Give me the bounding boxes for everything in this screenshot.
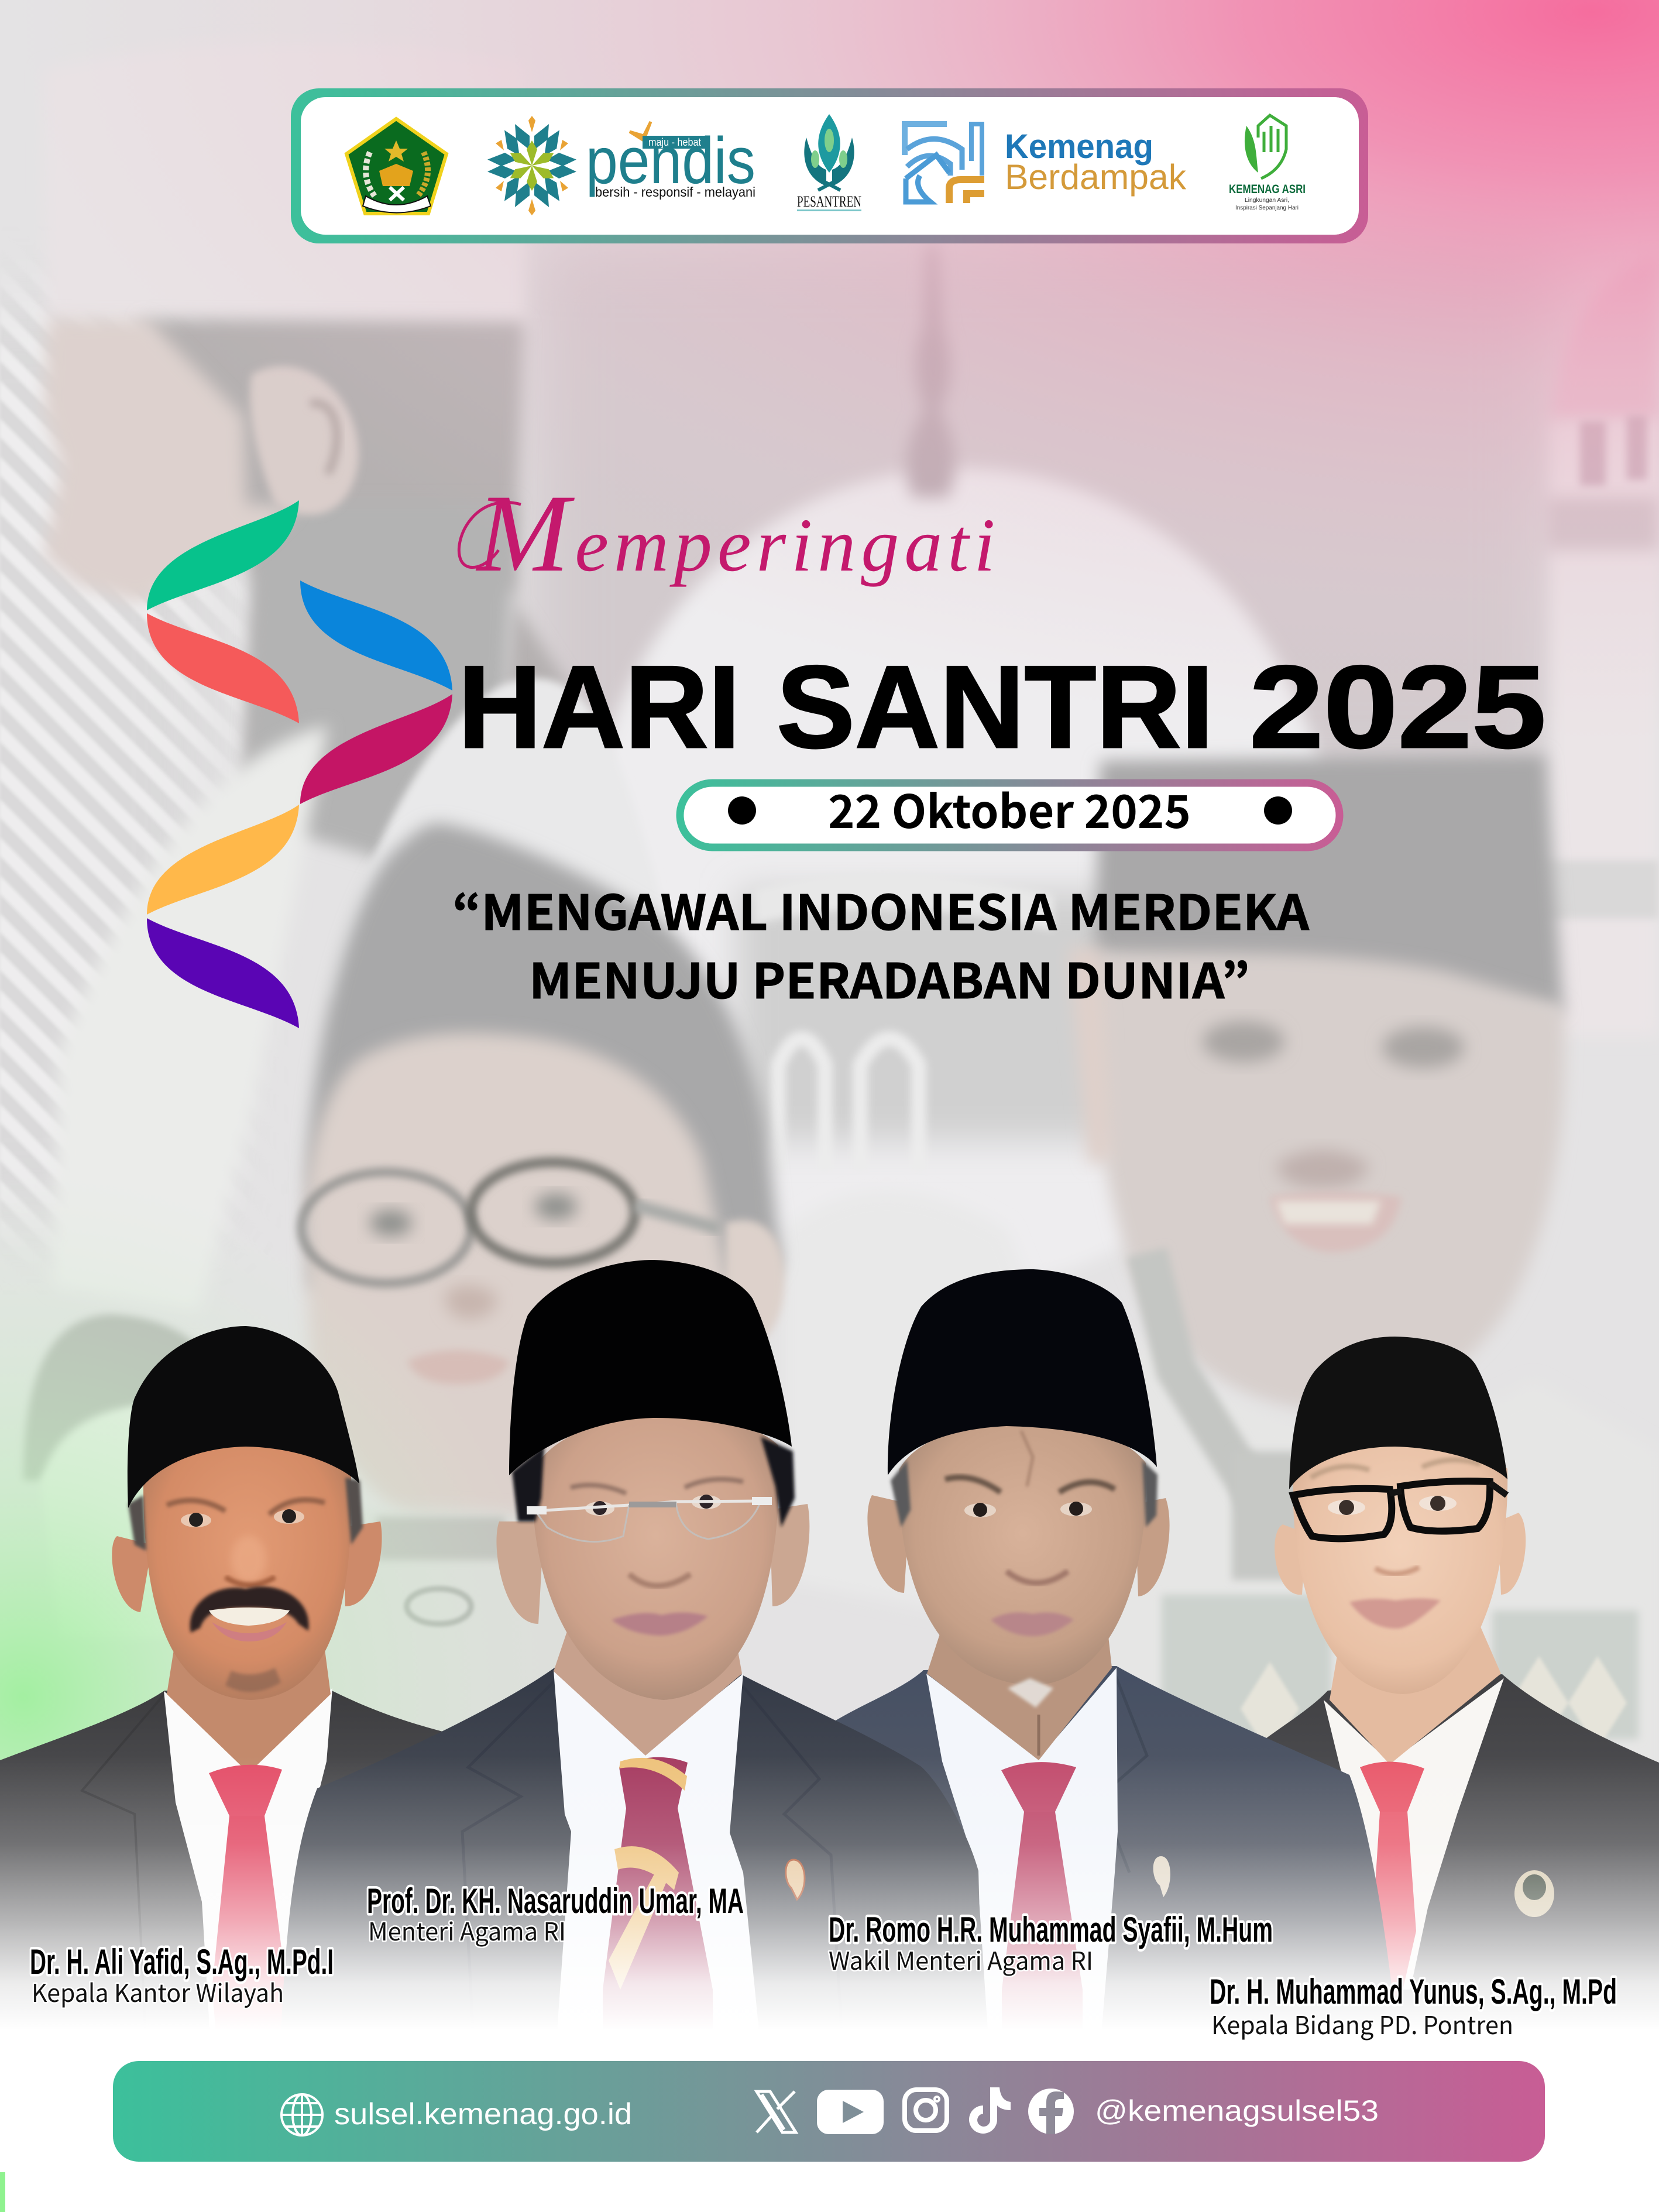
background photo montage xyxy=(0,0,1659,1763)
theme tagline xyxy=(452,874,1309,1012)
pin: ministry badge xyxy=(786,1860,805,1900)
background: small boy and white domes, lower left xyxy=(23,726,328,1639)
title: HARI SANTRI 2025: HARI xyxy=(458,642,740,772)
pendis tagline: bersih - responsif - melayani xyxy=(595,184,755,200)
pin: Kemenag badge xyxy=(1514,1870,1554,1917)
name: Ali Yafid: Dr. H. Ali Yafid, S.Ag., M.Pd.I xyxy=(30,1942,334,1981)
logo: Pesantren xyxy=(797,114,861,211)
icon: X xyxy=(757,2091,796,2132)
pendis star mark xyxy=(487,116,576,215)
title: HARI SANTRI 2025 xyxy=(458,642,1546,772)
portrait: Dr. H. Muhammad Yunus xyxy=(1229,1337,1659,2048)
logo: Kemenag Asri: Lingkungan Asri, xyxy=(1245,197,1289,204)
logo: pendis: maju - hebat xyxy=(648,136,701,148)
social handle: @kemenagsulsel53 xyxy=(1095,2094,1379,2127)
maju hebat tag xyxy=(630,122,651,140)
logo: Kemenag Asri xyxy=(1229,115,1306,211)
logo: Kemenag Berdampak: Berdampak xyxy=(1005,157,1187,197)
title: HARI SANTRI 2025: SANTRI xyxy=(777,642,1214,772)
name: Muhammad Syafii: Wakil Menteri Agama RI xyxy=(829,1942,1093,1977)
logo: Pesantren: PESANTREN xyxy=(797,193,861,210)
theme tagline: “MENGAWAL INDONESIA MERDEKA xyxy=(452,874,1309,944)
icon: globe xyxy=(281,2094,322,2135)
name: Muhammad Yunus xyxy=(1210,1972,1617,2042)
ribbon logo xyxy=(147,500,452,1028)
date text: 22 Oktober 2025 xyxy=(828,776,1191,841)
title: HARI SANTRI 2025: 2025 xyxy=(1249,642,1546,772)
bullet left xyxy=(728,796,756,825)
green corner sliver xyxy=(0,2172,5,2212)
name: Muhammad Yunus: Kepala Bidang PD. Pontren xyxy=(1211,2006,1513,2042)
theme tagline: MENUJU PERADABAN DUNIA” xyxy=(529,943,1250,1012)
date pill xyxy=(680,776,1339,847)
name: Muhammad Syafii xyxy=(829,1910,1273,1977)
logo bar xyxy=(291,88,1368,243)
portrait: Dr. Romo H.R. Muhammad Syafii xyxy=(819,1269,1399,2048)
name: Nasaruddin Umar: Prof. Dr. KH. Nasaruddin Umar, MA xyxy=(367,1881,744,1921)
name: Ali Yafid xyxy=(30,1942,334,2010)
logo: Kementerian Agama emblem xyxy=(346,119,446,214)
pin: ministry badge xyxy=(1153,1856,1170,1897)
background: mosque dome and spire xyxy=(328,246,1334,1639)
pendis wordmark: pendis xyxy=(586,124,755,197)
name: Ali Yafid: Kepala Kantor Wilayah xyxy=(32,1974,284,2010)
background: boy with glasses xyxy=(252,823,784,1814)
logo: Kemenag Asri: Inspirasi Sepanjang Hari xyxy=(1235,205,1299,211)
script heading: Memperingati: Memperingati xyxy=(475,472,1001,595)
background: boy in white cap, top left xyxy=(44,42,591,878)
icon: Instagram xyxy=(905,2090,947,2131)
icon: Facebook xyxy=(1028,2089,1074,2134)
Kemenag Berdampak wordmark: Kemenag xyxy=(1005,128,1153,166)
bullet right xyxy=(1264,796,1292,825)
logo: Kemenag Asri: KEMENAG ASRI xyxy=(1229,183,1306,196)
white bottom fade xyxy=(0,1756,1659,2031)
portrait: Prof. Dr. KH. Nasaruddin Umar xyxy=(280,1260,983,2048)
background: minaret, right xyxy=(1533,257,1659,1036)
portrait: Dr. H. Ali Yafid xyxy=(0,1326,480,2048)
logo: Kemenag Berdampak xyxy=(905,124,1187,203)
icon: YouTube xyxy=(817,2090,884,2134)
logo: pendis xyxy=(487,116,755,215)
Berdampak mark xyxy=(905,124,984,203)
background: smiling boy, right xyxy=(1065,755,1659,1843)
footer bar xyxy=(113,2061,1545,2162)
icon: TikTok xyxy=(969,2087,1011,2134)
website: sulsel.kemenag.go.id xyxy=(334,2097,632,2131)
name: Nasaruddin Umar: Menteri Agama RI xyxy=(368,1912,566,1948)
name: Muhammad Syafii: Dr. Romo H.R. Muhammad Syafii, M.Hum xyxy=(829,1910,1273,1949)
name: Nasaruddin Umar xyxy=(367,1881,744,1948)
